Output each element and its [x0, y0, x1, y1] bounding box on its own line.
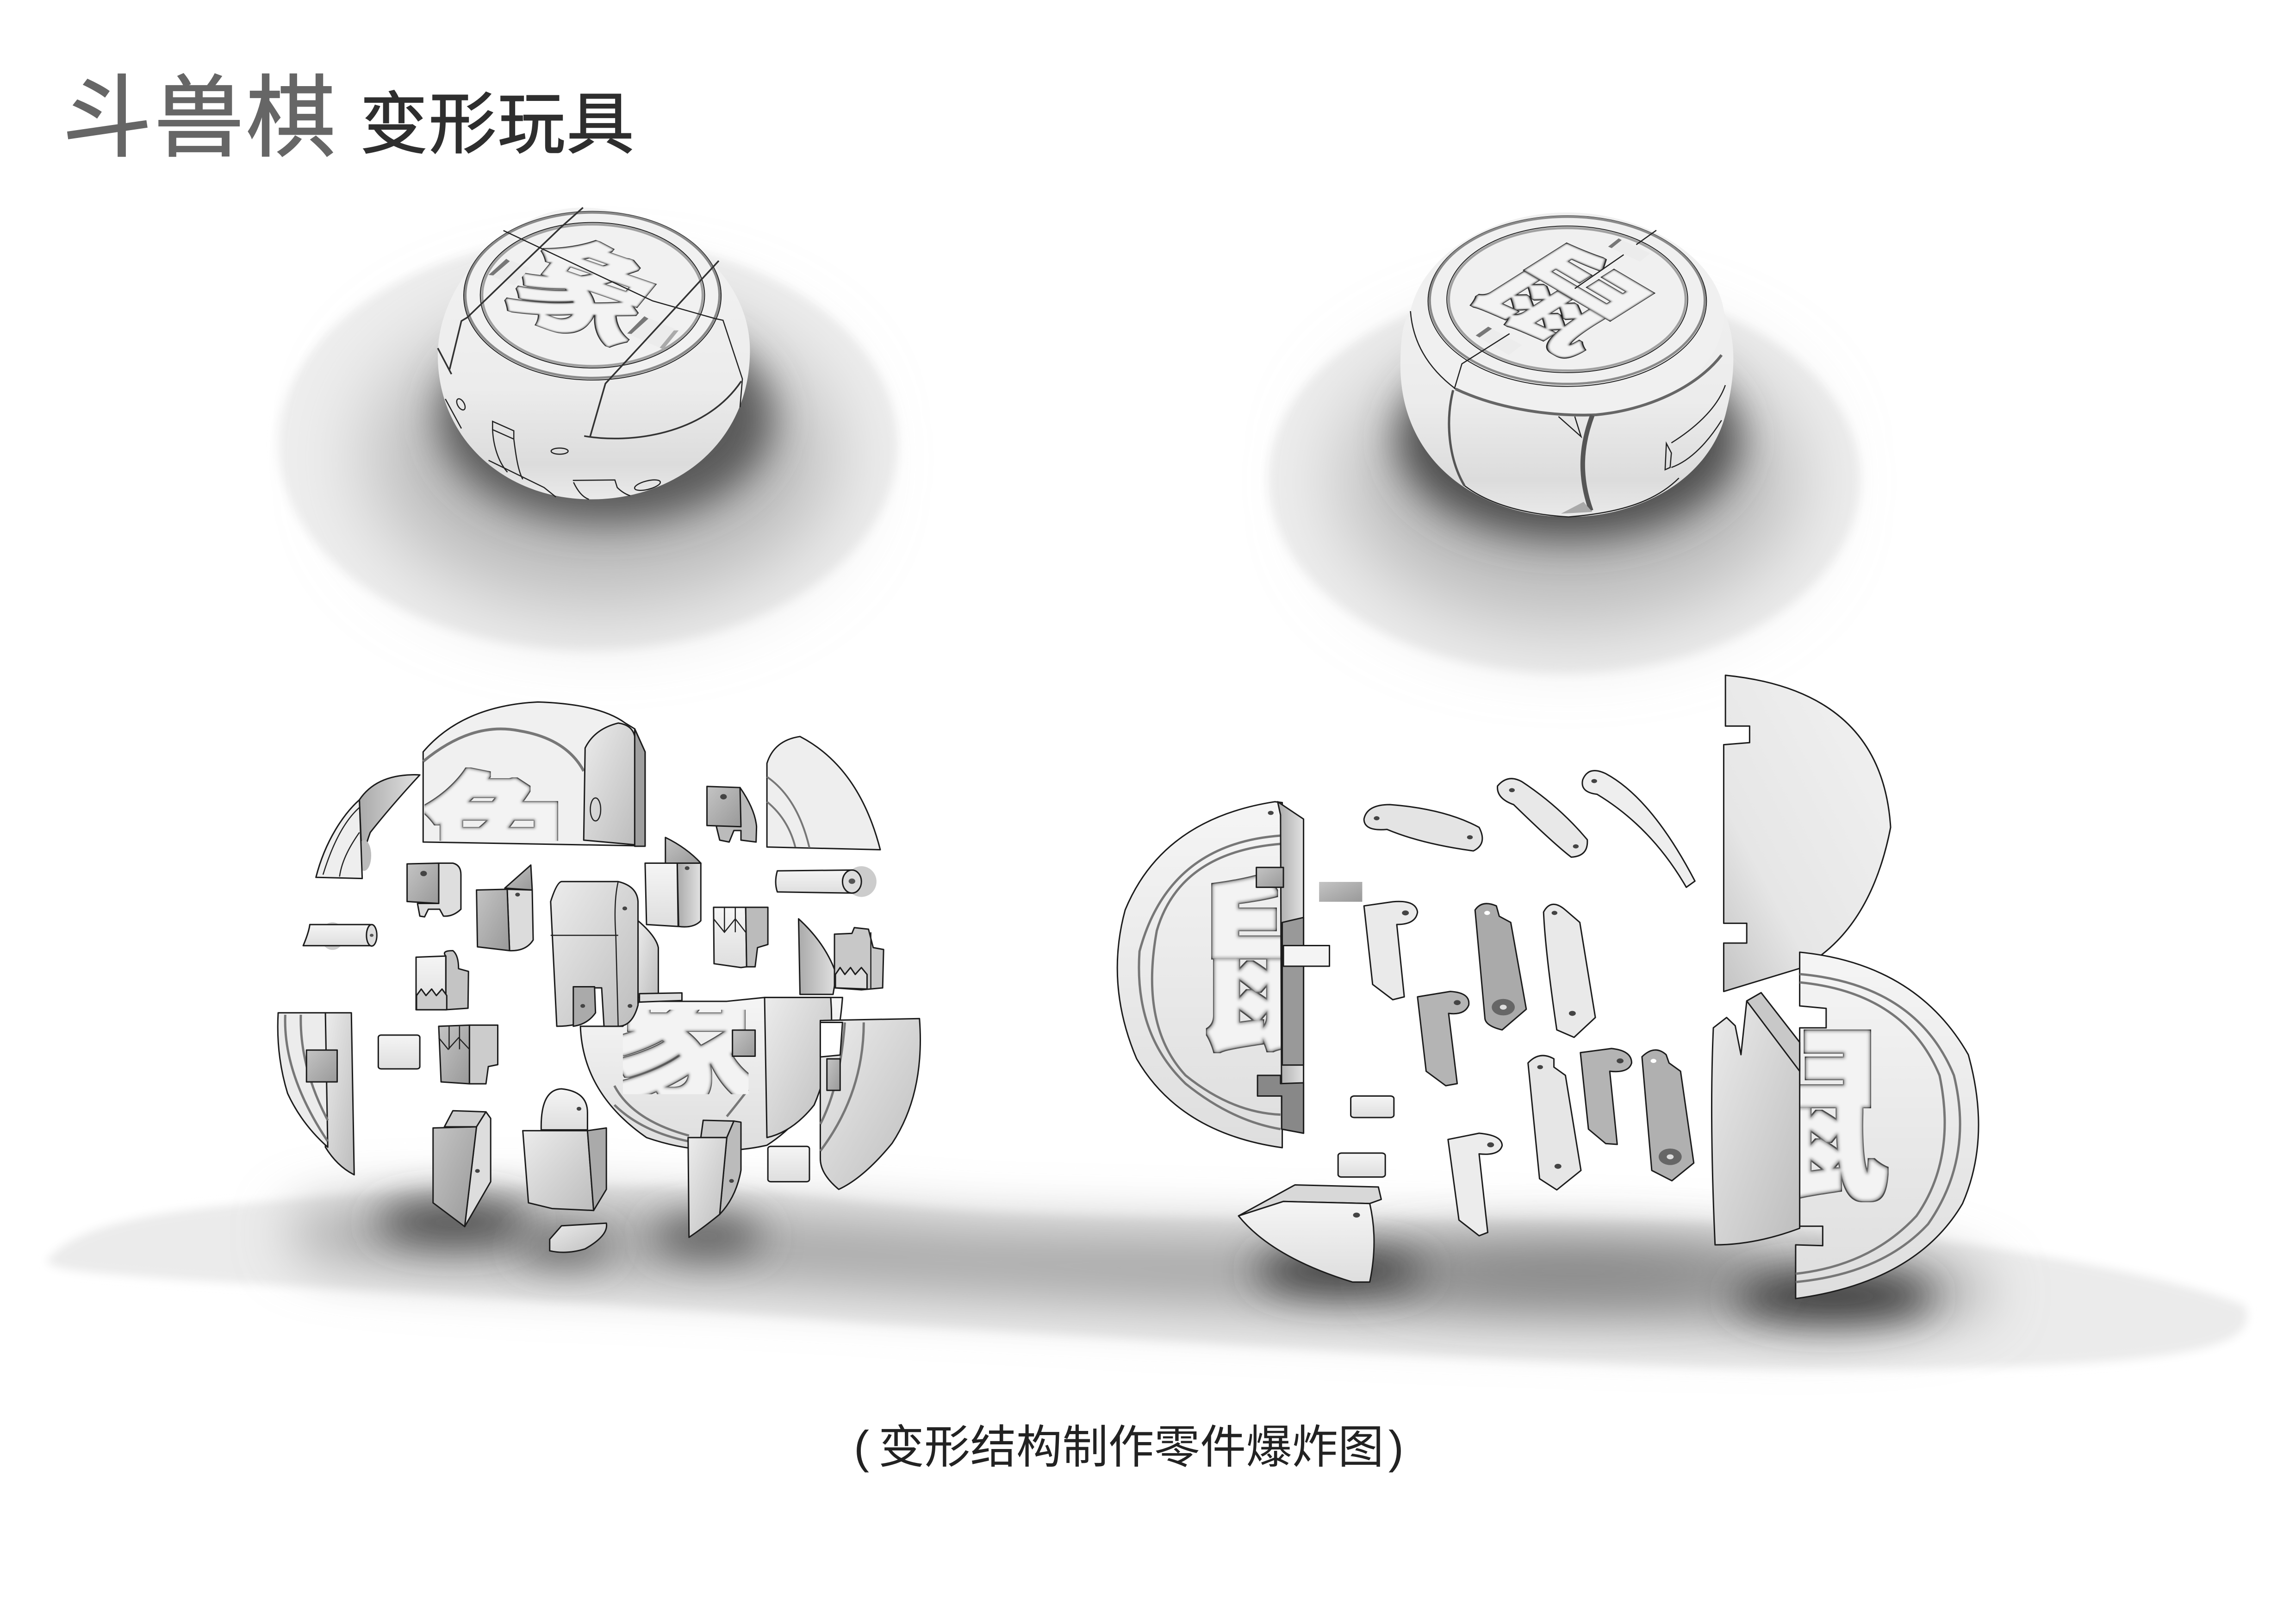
part: lower half shell with character: [579, 992, 843, 1150]
part: top right half disc: [1724, 675, 1891, 992]
exploded elephant parts: [278, 702, 921, 1252]
part: wedge: [1238, 1185, 1381, 1282]
part: block with teeth: [714, 907, 768, 968]
part: hinge block left middle: [416, 951, 468, 1010]
part: curved link 1: [1364, 805, 1482, 851]
part: tube right: [776, 866, 877, 897]
part: link with pin H: [1448, 1133, 1502, 1236]
part: small hinge block top: [707, 787, 757, 842]
part: link with pin G: [1642, 1050, 1694, 1181]
part: small cylinder B: [1338, 1153, 1385, 1177]
part: lower block right: [688, 1120, 741, 1237]
ball body: [1400, 212, 1733, 517]
part: right half disc: [1711, 952, 1979, 1299]
part: link with pin B: [1475, 904, 1526, 1030]
part: tube left: [303, 922, 377, 950]
part: curved link 3: [1582, 771, 1695, 887]
right assembled chess piece: mouse: [1400, 211, 1733, 517]
part: left half disc: [1117, 802, 1370, 1148]
part: left half disc: 鼠: [1191, 819, 1370, 1088]
seam lines on the ball: [438, 207, 742, 500]
part: top shell with character: 象: [417, 721, 578, 954]
relief character: 鼠: [1435, 211, 1703, 376]
part: small cylinder right: [768, 1146, 809, 1182]
part: link with pin E: [1528, 1056, 1581, 1190]
ball body: [438, 207, 750, 500]
caption: (: [854, 1421, 869, 1473]
part: triangular fin: [799, 919, 836, 994]
lid top face: [1411, 212, 1724, 416]
part: tall block: [645, 837, 701, 927]
part: left quarter shell: [278, 1013, 354, 1175]
shadow: left chess piece: [278, 238, 898, 650]
part: center side support: [638, 921, 658, 998]
shadow: right chess piece: [1268, 285, 1860, 674]
top face rings: [464, 212, 721, 380]
subtitle: 变形玩具: [360, 87, 634, 162]
part: link with pin A: [1364, 901, 1418, 999]
part: top right wedge: [767, 737, 880, 849]
part: left hinge block: [407, 863, 461, 917]
part: cylinder top: [1319, 882, 1362, 902]
part: center tall arch: [551, 881, 638, 1026]
part: right half disc: 鼠: [1711, 968, 1889, 1237]
part: block with teeth lower: [439, 1025, 498, 1084]
title: 斗兽棋: [62, 68, 336, 168]
part: small cylinder: [378, 1035, 420, 1069]
relief character: 象: [475, 202, 708, 371]
part: lower block center: [523, 1089, 606, 1211]
left assembled chess piece: elephant: [438, 202, 750, 500]
slots on the top face: [1476, 238, 1650, 355]
part: left arc shell: [316, 775, 420, 879]
shadow: ground under exploded parts: [46, 1186, 2247, 1369]
seam lines on the ball: [1411, 231, 1725, 517]
holes on the ball: [455, 397, 661, 493]
part: block with teeth right: [834, 928, 884, 990]
part: lower half shell with character: 象: [605, 906, 765, 1139]
caption: 变形结构制作零件爆炸图: [878, 1421, 1384, 1473]
part: folded panel: [1711, 993, 1800, 1245]
part: small cylinder A: [1351, 1096, 1394, 1118]
slots on the top face: [489, 259, 678, 350]
exploded mouse parts: [1117, 675, 1979, 1299]
part: right quarter shell: [820, 1018, 921, 1189]
part: link with pin D: [1418, 992, 1469, 1086]
part: link with pin C: [1543, 904, 1595, 1037]
part: top shell with character: [422, 701, 646, 847]
part: small link bottom: [550, 1223, 607, 1252]
part: link with pin F: [1580, 1049, 1631, 1144]
caption: ): [1388, 1421, 1404, 1473]
part: lower block left: [433, 1111, 491, 1227]
part: curved link 2: [1498, 779, 1587, 857]
part: block with fin: [477, 865, 533, 951]
